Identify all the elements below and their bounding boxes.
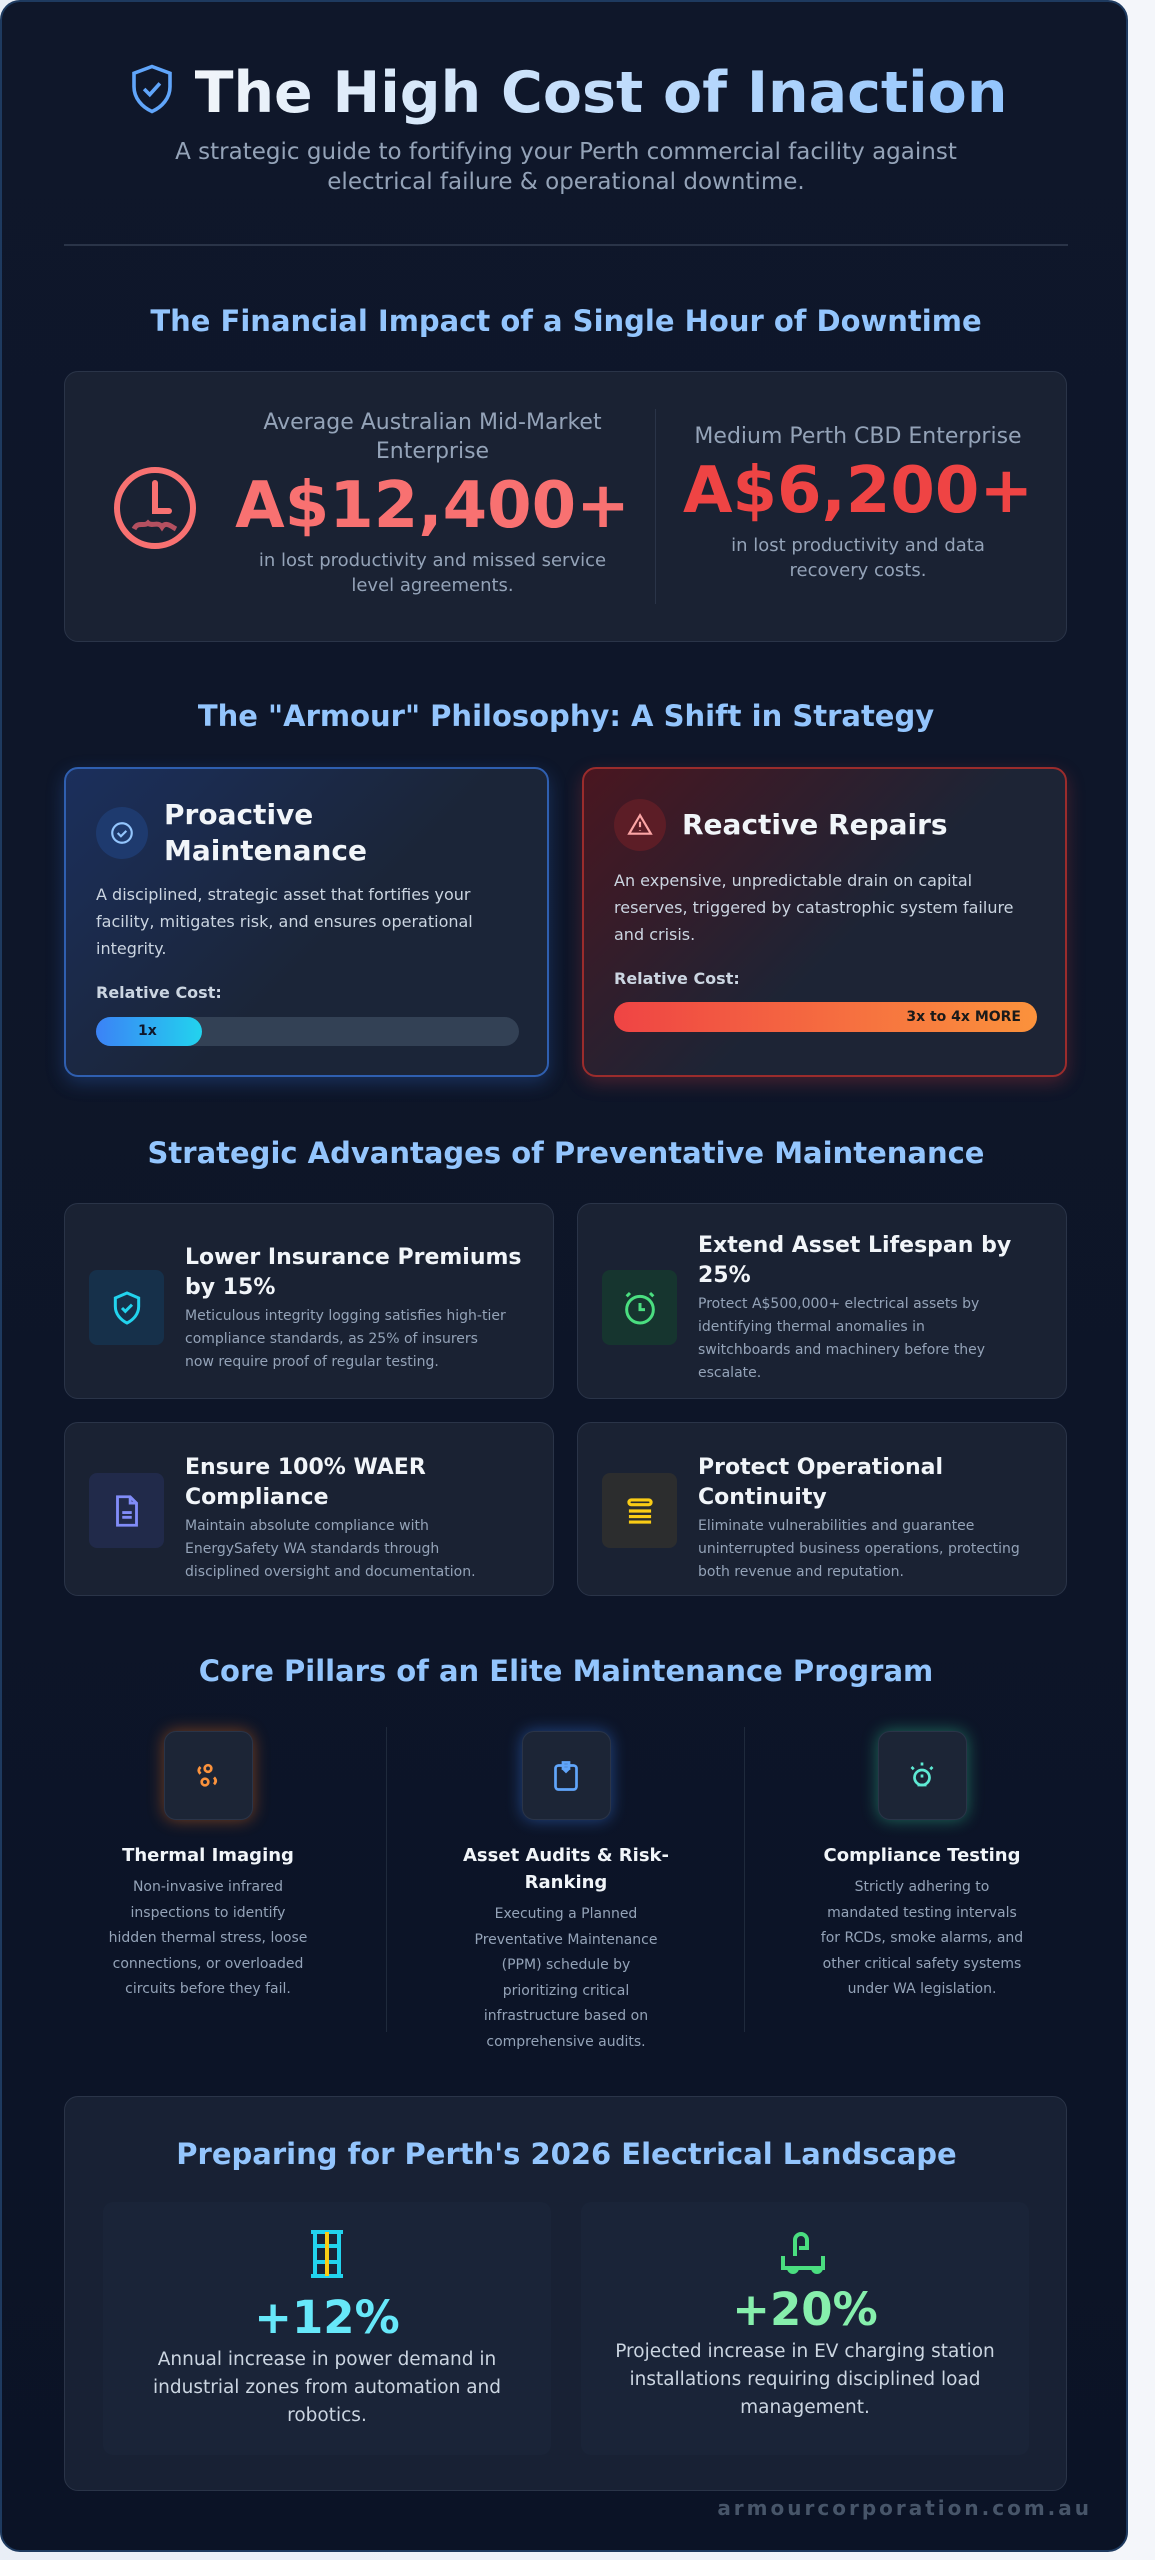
pillar: thermal imaging: hidden thermal stress, loose xyxy=(109,1930,307,1946)
bar: 1x xyxy=(96,1017,519,1046)
icon: check circle xyxy=(96,807,148,859)
pillar: asset audits: prioritizing critical xyxy=(503,1982,629,1998)
pillar: compliance testing xyxy=(821,1721,1023,1997)
stat: EV charging: +20% xyxy=(732,2283,878,2336)
card text xyxy=(96,885,473,958)
panel: proactive maintenance xyxy=(64,767,549,1077)
text: Meticulous integrity logging satisfies high-tier xyxy=(185,1308,506,1324)
heading: strategic advantages: Strategic Advantages of Preventative Maintenance xyxy=(148,1136,984,1170)
panel: financial impact xyxy=(64,371,1067,642)
stat: CBD enterprise xyxy=(683,424,1033,581)
pillar: thermal imaging: Thermal Imaging xyxy=(122,1845,294,1866)
pillar: thermal imaging: circuits before they fail. xyxy=(125,1981,291,1997)
title: The High Cost of Inaction xyxy=(195,60,1007,126)
pillar: thermal imaging: inspections to identify xyxy=(131,1904,285,1920)
pillar: compliance testing: Compliance Testing xyxy=(824,1845,1020,1866)
card text: facility, mitigates risk, and ensures operational xyxy=(96,912,473,931)
icon: battery xyxy=(311,2230,343,2278)
pillar: compliance testing: mandated testing intervals xyxy=(827,1904,1017,1920)
pillar: compliance testing: for RCDs, smoke alarms, and xyxy=(821,1930,1023,1946)
panel: reactive repairs: Relative Cost: xyxy=(614,969,740,988)
text: both revenue and reputation. xyxy=(698,1564,904,1580)
text: Protect A$500,000+ electrical assets by xyxy=(698,1296,979,1312)
pillar: thermal imaging xyxy=(109,1720,307,1997)
card title xyxy=(164,798,367,867)
subtitle xyxy=(175,139,957,195)
card title: Proactive xyxy=(164,798,313,831)
stat: CBD enterprise: recovery costs. xyxy=(790,560,926,581)
pillar: asset audits: Preventative Maintenance xyxy=(474,1932,657,1948)
heading: core pillars: Core Pillars of an Elite Maintenance Program xyxy=(199,1654,933,1688)
heading: Preparing for Perth's 2026 Electrical Landscape xyxy=(176,2137,957,2171)
pillar: compliance testing: other critical safety systems xyxy=(823,1956,1021,1972)
text: by 15% xyxy=(185,1275,275,1300)
text: switchboards and machinery before they xyxy=(698,1342,985,1358)
heading: financial impact: The Financial Impact of a Single Hour of Downtime xyxy=(150,304,982,338)
card title: Reactive Repairs xyxy=(682,808,948,841)
text xyxy=(185,1455,476,1580)
text: 25% xyxy=(698,1263,751,1288)
subtitle: electrical failure & operational downtime. xyxy=(327,169,805,195)
pillar: asset audits: infrastructure based on xyxy=(484,2008,648,2024)
stat: CBD enterprise: Medium Perth CBD Enterprise xyxy=(694,424,1022,449)
subtitle: A strategic guide to fortifying your Perth commercial facility against xyxy=(175,139,957,165)
stat: EV charging: installations requiring disciplined load xyxy=(629,2369,981,2390)
stat: mid-market: in lost productivity and missed service xyxy=(259,550,606,571)
stat: EV charging: Projected increase in EV charging station xyxy=(615,2341,995,2362)
stat: CBD enterprise: in lost productivity and data xyxy=(731,535,985,556)
text: Ensure 100% WAER xyxy=(185,1455,426,1480)
text xyxy=(698,1233,1011,1381)
panel: reactive repairs xyxy=(582,767,1067,1077)
panel: lifespan xyxy=(577,1203,1067,1399)
stat: mid-market: level agreements. xyxy=(351,575,514,596)
stat: mid-market xyxy=(235,410,630,596)
pillar: asset audits xyxy=(463,1721,669,2050)
pillar: asset audits: Asset Audits & Risk- xyxy=(463,1845,669,1866)
pillar: asset audits: comprehensive audits. xyxy=(486,2034,646,2050)
card text xyxy=(614,871,1014,944)
pillar: thermal imaging: Non-invasive infrared xyxy=(133,1879,283,1895)
text: Lower Insurance Premiums xyxy=(185,1245,522,1270)
stat: power demand: Annual increase in power demand in xyxy=(158,2349,496,2370)
panel: 2026 landscape xyxy=(64,2096,1067,2491)
icon: thermal xyxy=(164,1731,252,1820)
footer url: armourcorporation.com.au xyxy=(717,2496,1092,2520)
text xyxy=(698,1455,1020,1580)
card text: An expensive, unpredictable drain on capital xyxy=(614,871,972,890)
text: identifying thermal anomalies in xyxy=(698,1319,925,1335)
icon: shield xyxy=(132,64,172,114)
icon: bulb xyxy=(878,1731,966,1820)
pillar: compliance testing: Strictly adhering to xyxy=(855,1879,989,1895)
pillar: compliance testing: under WA legislation. xyxy=(848,1981,996,1997)
text: Eliminate vulnerabilities and guarantee xyxy=(698,1518,974,1534)
stat: mid-market: A$12,400+ xyxy=(235,469,630,543)
icon: clock xyxy=(114,467,196,549)
icon: alarm clock xyxy=(602,1270,677,1345)
stat: power demand: robotics. xyxy=(287,2405,367,2426)
icon: warning xyxy=(614,799,666,851)
text: uninterrupted business operations, protecting xyxy=(698,1541,1020,1557)
card text: integrity. xyxy=(96,939,166,958)
bar: 3x-4x xyxy=(614,1002,1037,1032)
text: Compliance xyxy=(185,1485,328,1510)
icon: document xyxy=(89,1473,164,1548)
text: Maintain absolute compliance with xyxy=(185,1518,429,1534)
stat: power demand: industrial zones from automation and xyxy=(153,2377,501,2398)
stat: mid-market: Average Australian Mid-Market xyxy=(263,410,602,435)
text: Extend Asset Lifespan by xyxy=(698,1233,1011,1258)
stat: EV charging: management. xyxy=(740,2397,870,2418)
text: compliance standards, as 25% of insurers xyxy=(185,1331,478,1347)
panel: insurance xyxy=(64,1203,554,1399)
icon: clipboard xyxy=(522,1731,610,1820)
bar: 1x: 1x xyxy=(138,1023,157,1039)
pillar: asset audits: Executing a Planned xyxy=(495,1906,637,1922)
panel: compliance xyxy=(64,1422,554,1596)
icon: shield xyxy=(89,1270,164,1345)
panel: continuity xyxy=(577,1422,1067,1596)
card text: and crisis. xyxy=(614,925,695,944)
text: Protect Operational xyxy=(698,1455,943,1480)
pillar: asset audits: Ranking xyxy=(525,1872,607,1893)
stat: power demand: +12% xyxy=(254,2291,400,2344)
card text: A disciplined, strategic asset that fortifies your xyxy=(96,885,470,904)
card title: Maintenance xyxy=(164,834,367,867)
text: escalate. xyxy=(698,1365,761,1381)
stat: EV charging xyxy=(581,2202,1029,2455)
pillar: asset audits: (PPM) schedule by xyxy=(502,1957,630,1973)
bar: 3x-4x: 3x to 4x MORE xyxy=(906,1009,1021,1025)
text: now require proof of regular testing. xyxy=(185,1354,439,1370)
panel: proactive maintenance: Relative Cost: xyxy=(96,983,222,1002)
icon: EV charger xyxy=(781,2232,825,2274)
stat: CBD enterprise: A$6,200+ xyxy=(683,454,1033,528)
text: disciplined oversight and documentation. xyxy=(185,1564,476,1580)
pillar: thermal imaging: connections, or overloaded xyxy=(113,1956,303,1972)
text: Continuity xyxy=(698,1485,827,1510)
icon: layers xyxy=(602,1473,677,1548)
text xyxy=(185,1245,522,1370)
stat: mid-market: Enterprise xyxy=(376,439,489,464)
heading: armour philosophy: The "Armour" Philosophy: A Shift in Strategy xyxy=(198,699,934,733)
stat: power demand xyxy=(103,2202,551,2455)
text: EnergySafety WA standards through xyxy=(185,1541,439,1557)
card text: reserves, triggered by catastrophic system failure xyxy=(614,898,1014,917)
